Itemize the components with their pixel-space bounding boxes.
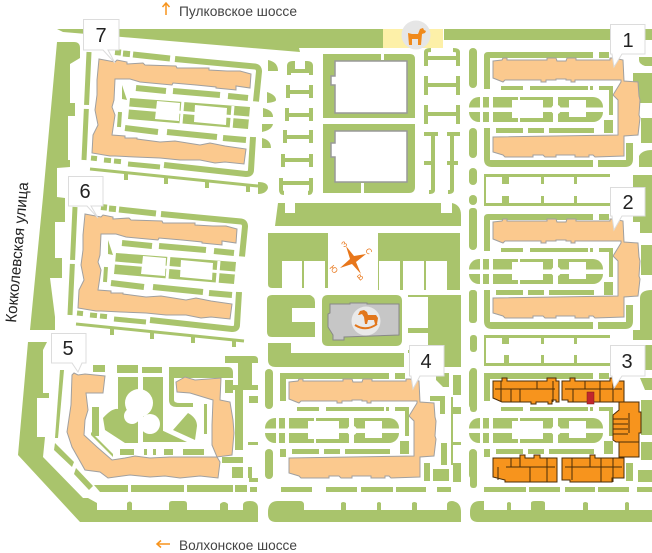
label: Volkhonskoe highway: Волхонское шоссе [179, 537, 297, 553]
block 2 greenery [466, 210, 633, 329]
icon: compass: В [355, 272, 365, 283]
label: Kokkolevskaya street: Кокколевская улица [3, 181, 32, 323]
between-block strips [281, 168, 652, 492]
building 2 [493, 219, 640, 318]
icon: compass [328, 239, 374, 283]
callout 7 [84, 20, 119, 63]
kindergarten building [328, 303, 399, 340]
building 5 [67, 373, 234, 478]
right edge lawns [633, 57, 652, 435]
arrow: up [162, 3, 170, 15]
callout 6 [68, 176, 103, 218]
H-shaped paths column B [424, 50, 460, 192]
callout 5 [52, 334, 86, 372]
callout 1 [610, 24, 645, 67]
callout numbers: 6 [79, 181, 91, 203]
callout numbers: 2 [622, 192, 634, 214]
callout 2 [610, 188, 645, 230]
callout numbers: 5 [62, 338, 74, 360]
building: north [331, 61, 407, 113]
callout numbers [62, 25, 634, 373]
bottom green centre [268, 501, 461, 522]
block 3 greenery [466, 369, 613, 479]
block 5 garden [54, 356, 258, 492]
label: Pulkovo highway: Пулковское шоссе [179, 3, 297, 19]
selected unit [587, 392, 594, 404]
block 7 greenery [84, 52, 259, 192]
block 1 greenery [466, 48, 633, 167]
central green lawn with two buildings [323, 54, 415, 193]
building 1 [493, 58, 640, 157]
top green band [57, 29, 652, 52]
building 6 [78, 214, 237, 319]
callout numbers: 7 [95, 25, 107, 47]
callout 4 [410, 346, 444, 389]
block 3 east lawns [626, 442, 652, 482]
building: south [331, 131, 407, 182]
building 4 [289, 379, 436, 478]
callout numbers: 1 [622, 30, 634, 52]
icon: compass: С [363, 246, 374, 257]
callout numbers: 4 [420, 351, 432, 373]
block 4 east lawns [424, 373, 461, 482]
block 6 greenery [70, 207, 245, 347]
arrow: left [157, 540, 170, 548]
building 7 [92, 59, 251, 164]
H-shaped paths column A [281, 63, 311, 193]
left green border north [30, 42, 80, 330]
left green border south and bottom [18, 342, 258, 522]
bottom green right [470, 501, 652, 522]
icon: compass: Ю [328, 263, 340, 275]
kindergarten lawn [322, 295, 402, 346]
dog park strip [383, 29, 443, 48]
icon: dog park [402, 20, 430, 50]
number callouts [52, 20, 645, 389]
icon: rocking horse [352, 306, 380, 336]
half-round lawn pieces [258, 60, 278, 194]
central plaza lawns [267, 203, 461, 367]
building 3 highlighted [493, 378, 641, 482]
callout 3 [610, 346, 645, 388]
callout numbers: 3 [621, 351, 633, 373]
block 4 greenery [262, 369, 409, 479]
icon: compass: З [340, 239, 349, 249]
